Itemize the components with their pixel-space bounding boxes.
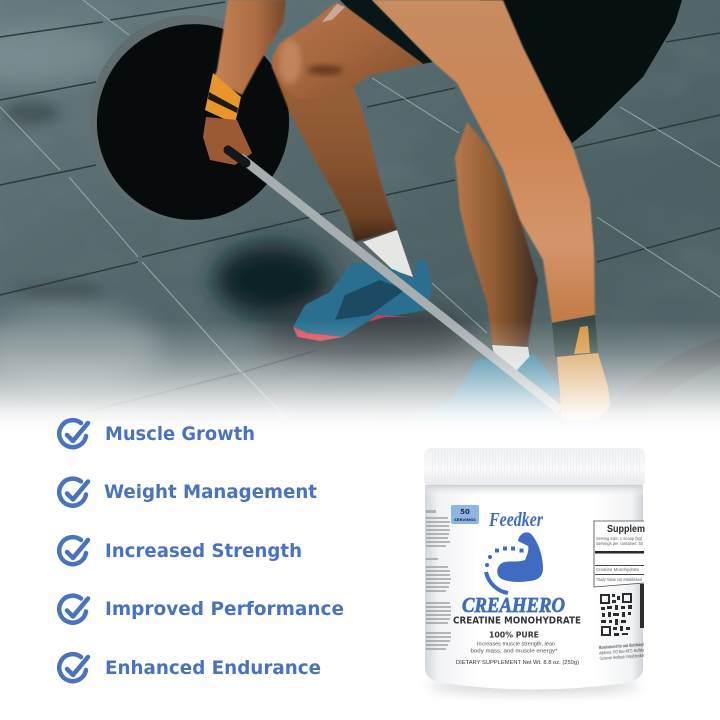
barbell — [228, 150, 560, 410]
check icon — [59, 654, 88, 681]
manufacturer text: Manufactured for and distributed — [599, 642, 644, 650]
second weight plate — [597, 338, 720, 420]
jar body — [425, 487, 643, 690]
rear calf — [455, 122, 538, 349]
hand on bar — [203, 117, 252, 165]
rear shoe — [407, 353, 560, 425]
shorts — [340, 0, 682, 143]
flexed arm logo — [485, 532, 543, 593]
net weight line: DIETARY SUPPLEMENT Net Wt. 8.8 oz. (250g) — [456, 660, 579, 666]
check icon — [59, 420, 88, 447]
rear leg — [372, 0, 595, 323]
supplement facts box: Creatine Monohydrate — [596, 567, 639, 573]
product type: CREATINE MONOHYDRATE — [453, 616, 581, 626]
product name: CREAHERO — [462, 593, 565, 617]
claim text: Increases muscle strength, lean — [477, 642, 555, 648]
servings badge: SERVINGS — [454, 517, 476, 522]
side label text — [426, 510, 451, 650]
servings badge: 50 — [460, 508, 470, 516]
claim text — [470, 642, 558, 654]
rear foot — [557, 353, 612, 420]
arm — [213, 0, 286, 95]
product jar — [424, 448, 645, 693]
supplement facts box — [594, 521, 645, 587]
white lower area — [0, 428, 720, 720]
label: Muscle Growth — [105, 423, 255, 445]
benefit: improved performance — [59, 596, 344, 623]
benefits list — [59, 420, 344, 681]
white sock with logo — [363, 230, 413, 277]
photo: athlete lifting barbell — [0, 0, 720, 430]
weight plate left — [71, 0, 307, 239]
brand name: Feedker — [488, 509, 543, 531]
manufacturer text: Address: PO Box 4871 Buffalo — [599, 647, 645, 655]
supplement facts box: *Daily Value not established — [596, 577, 642, 583]
benefit: muscle growth — [59, 420, 255, 447]
jar cap — [424, 448, 645, 485]
purity: 100% PURE — [489, 630, 539, 640]
supplement facts box: Supplem — [607, 523, 645, 535]
label: Weight Management — [104, 481, 317, 503]
manufacturer text: Customer feedback: help@feedker — [599, 653, 645, 661]
jar shadow — [428, 679, 640, 693]
manufacturer text — [599, 642, 645, 661]
benefit: enhanced endurance — [59, 654, 321, 681]
front shoe — [293, 260, 432, 341]
rear sock — [492, 345, 532, 372]
orange wrist wrap — [205, 73, 241, 124]
label: Improved Performance — [105, 598, 344, 620]
supplement facts box: Serving Size: 1 Scoop (5g) — [596, 536, 642, 542]
front leg — [272, 2, 433, 242]
floor shadow — [214, 244, 470, 367]
benefit: increased strength — [59, 537, 302, 564]
barcode strip — [640, 584, 644, 628]
jar shoulder shading — [425, 485, 643, 497]
ankle band — [552, 315, 598, 357]
servings badge — [451, 505, 479, 524]
white fade — [0, 320, 720, 430]
supplement facts box: Servings per container: 50 — [596, 541, 643, 547]
shorts leg band — [340, 0, 433, 64]
gym floor tiles — [0, 0, 720, 430]
benefit: weight management — [59, 479, 317, 506]
label: Increased Strength — [105, 540, 302, 562]
label: Enhanced Endurance — [105, 657, 321, 679]
QR code — [600, 593, 632, 636]
check icon — [59, 537, 88, 564]
claim text: body mass, and muscle energy* — [470, 648, 558, 654]
check icon — [59, 596, 88, 623]
check icon — [59, 479, 88, 506]
